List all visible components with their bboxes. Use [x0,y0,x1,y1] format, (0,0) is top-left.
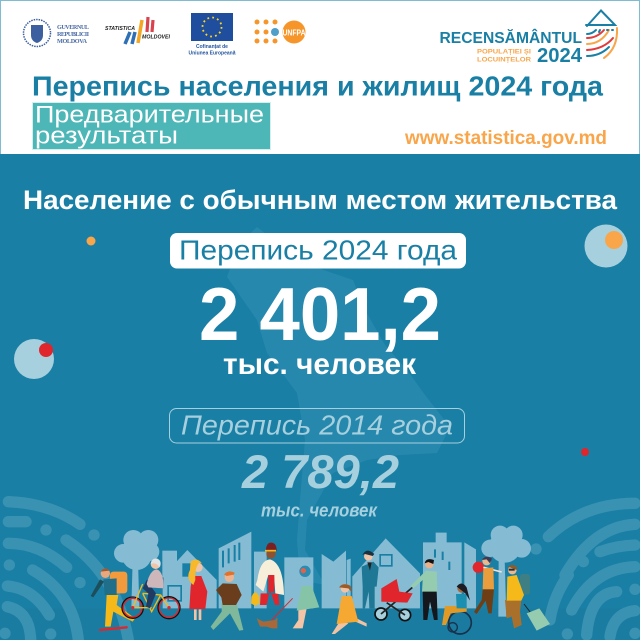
title: Перепись населения и жилищ 2024 года [32,70,603,102]
logo: Recensamantul 2024: LOCUINȚELOR [477,56,531,64]
stroller [375,579,413,621]
unit: 2014: тыс. человек [261,500,378,520]
logo: European Union flag [189,13,236,56]
logo: Recensamantul 2024: RECENSĂMÂNTUL [440,29,582,47]
person: pregnant woman [188,560,207,620]
person: cyclist [122,558,180,619]
house right [352,538,420,608]
illustration: city and people [0,502,640,640]
city left [114,530,313,608]
logo: government of Moldova [24,20,90,46]
logo: European Union flag: Cofinanțat de [196,44,228,50]
city right [322,526,531,617]
logo: Statistica Moldovei [105,17,170,44]
unit: 2024: тыс. человек [223,348,416,381]
person: woman in white coat [251,543,284,606]
logo: Statistica Moldovei: STATISTICA [105,26,135,32]
logo: Recensamantul 2024: 2024 [537,45,583,67]
tower [219,532,251,608]
map of Moldova silhouette [227,227,450,585]
person: man in blue suit [362,551,379,608]
person: man in green shirt [411,559,438,620]
subtitle box: Предварительные [35,102,264,128]
person: woman in wheelchair [442,583,471,634]
tree [114,530,159,608]
person: boy with backpack [211,571,243,631]
logo: Recensamantul 2024: POPULAȚIEI ȘI [477,48,531,56]
logo: European Union flag: Uniunea Europeană [189,50,236,56]
subtitle box [32,102,270,150]
ground [0,608,640,640]
logo: government of Moldova: GUVERNUL [57,24,89,31]
person: skateboarder [91,569,135,630]
logo: Recensamantul 2024 [440,10,617,67]
logo: Statistica Moldovei: MOLDOVEI [142,34,170,40]
decorative circles [14,224,628,456]
person: traveller with suitcase [505,565,550,631]
tower right [423,533,476,608]
logo: UNFPA: UNFPA [282,28,306,38]
subtitle box: результаты [35,122,178,150]
panel: header [0,0,640,154]
icon: house with drop [586,10,617,58]
website link: www.statistica.gov.md [404,127,607,149]
logo: government of Moldova: REPUBLICII [57,31,90,38]
logo: UNFPA [254,20,306,44]
label: census 2014: Перепись 2014 года [181,410,453,440]
heading: Население с обычным местом жительства [23,185,618,215]
arcs: left [5,502,128,640]
value: 2014 population: 2 789,2 [241,445,399,498]
person: girl in orange dress [332,584,367,634]
logo: government of Moldova: MOLDOVA [57,38,88,45]
arcs: right [536,503,635,637]
value: 2024 population: 2 401,2 [199,272,441,356]
person: woman with dog [257,566,319,628]
person: man with guitar [473,557,502,614]
house [163,550,217,608]
tree right [481,526,531,617]
label: census 2024: Перепись 2024 года [179,234,457,266]
